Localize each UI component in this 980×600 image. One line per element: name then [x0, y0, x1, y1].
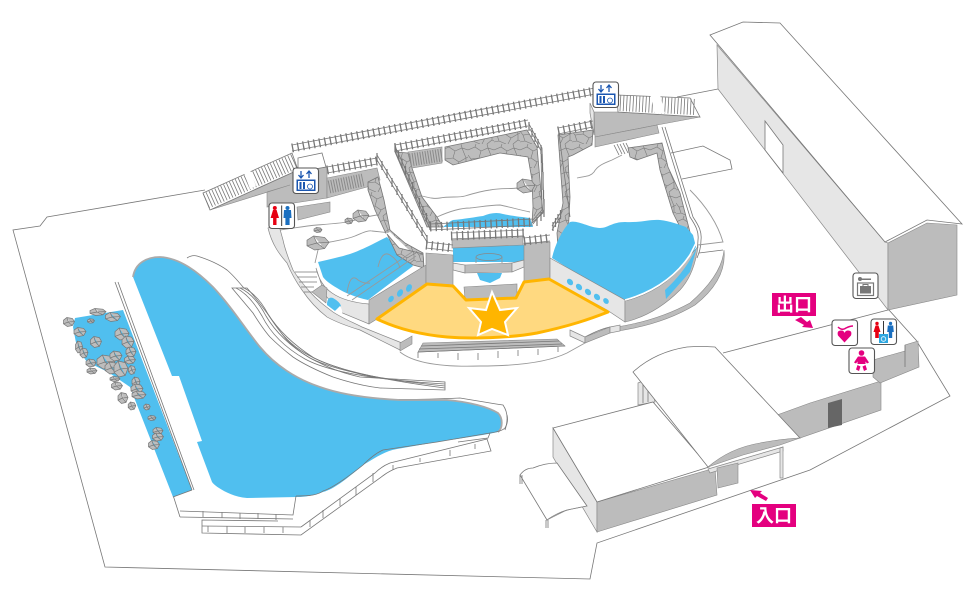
icon: restroom left [269, 203, 294, 228]
icon: coin locker [853, 273, 878, 298]
entrance label: 入口 [756, 506, 792, 526]
entrance hall: rear wing [777, 341, 919, 438]
icon: elevator left [293, 168, 318, 194]
stage towers [426, 235, 550, 285]
rocks: left pool [307, 210, 369, 250]
main pool [133, 257, 502, 498]
rear building [710, 22, 962, 310]
plaza outline [671, 146, 732, 179]
right outer walkway [570, 190, 724, 343]
right amphitheatre pool [550, 220, 698, 322]
star marker [469, 292, 517, 335]
left blue strip [73, 310, 192, 497]
exit arrow [795, 317, 813, 328]
entrance hall: low building [553, 378, 717, 532]
left pool: stone wall and fence [280, 153, 427, 268]
entrance arrow [750, 490, 768, 501]
right pool: stone walls and fence [552, 121, 701, 258]
left strip rail [115, 282, 194, 497]
back fence [292, 88, 595, 151]
left stairs and service building [203, 153, 380, 220]
small canopy [520, 463, 587, 528]
icon: baby care [849, 348, 874, 374]
left outer walkway [268, 222, 412, 351]
main pool lower terrace [173, 415, 508, 535]
icon: elevator right [593, 82, 618, 108]
pool rim [133, 257, 502, 432]
icon: accessible restroom [871, 319, 896, 344]
spectator seating [400, 339, 585, 366]
central back pool [395, 120, 544, 230]
site boundary [13, 89, 950, 579]
entrance hall: curved roof [633, 346, 800, 488]
icon: heart [832, 320, 858, 346]
left amphitheatre pool [312, 232, 426, 324]
exit label: 出口 [776, 295, 812, 315]
central stage pool [451, 230, 524, 299]
rocks: left strip [64, 308, 164, 450]
right stairs and service building [590, 94, 700, 155]
main pool promenade and stairs [187, 256, 507, 430]
highlighted seating area [377, 279, 608, 338]
